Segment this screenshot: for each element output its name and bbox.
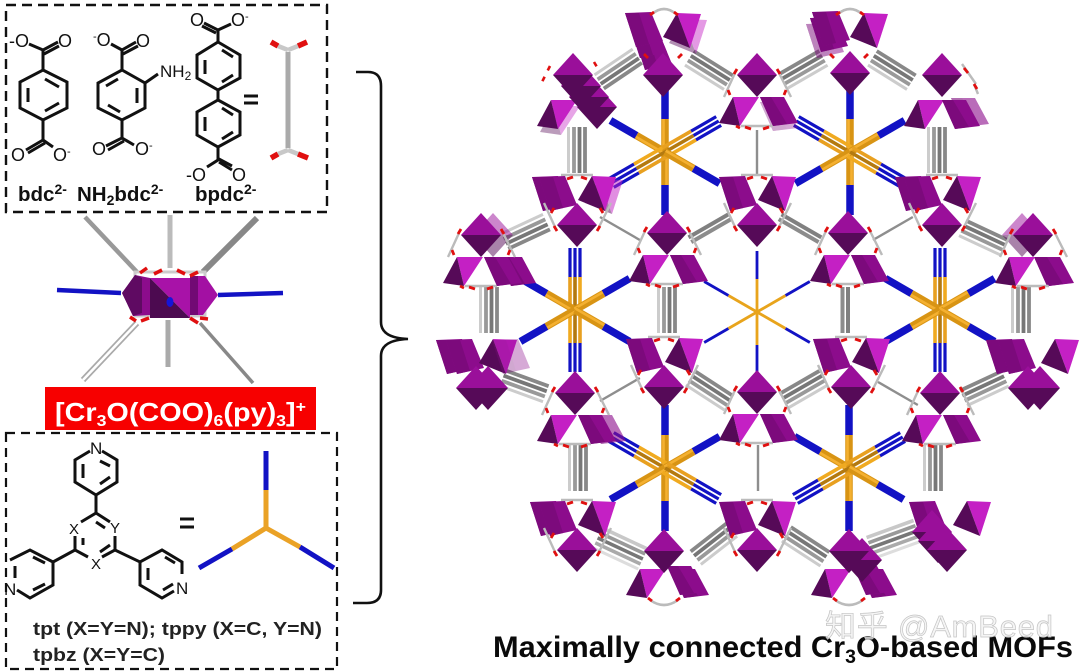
molecule: bpdc: O — [232, 165, 246, 185]
molecule: tripyridyl core: Y — [110, 520, 120, 537]
star: central node — [704, 251, 810, 373]
star: bottom right tritopic node — [793, 405, 905, 531]
chromium oxide clusters, upper half — [443, 9, 1074, 289]
title caption: 3 — [845, 647, 856, 668]
red label: cluster formula: 3 — [97, 413, 107, 430]
title caption: O-based MOFs — [856, 631, 1073, 664]
red label: cluster formula: 6 — [214, 413, 224, 430]
label: NH2bdc2-: 2- — [151, 181, 164, 197]
red label: cluster formula: (py) — [223, 397, 276, 427]
chromium oxide clusters, lower half — [436, 337, 1079, 605]
molecule: tripyridyl core: X — [69, 521, 79, 538]
molecule: bdc: O — [58, 31, 72, 51]
red label: cluster formula: 3 — [276, 413, 286, 430]
molecule: bdc: O — [53, 145, 67, 165]
label: bpdc2-: bpdc — [195, 183, 244, 206]
star: top left tritopic node — [609, 89, 721, 215]
molecule: bpdc: - — [245, 11, 249, 23]
molecule: tripyridyl core: N — [90, 439, 102, 458]
label: NH2bdc2-: 2 — [107, 192, 115, 208]
molecule: NH2bdc: O — [92, 139, 106, 159]
equals sign — [244, 96, 258, 103]
molecule: NH2bdc: O — [97, 30, 111, 50]
label: bpdc2-: 2- — [244, 181, 257, 197]
ligand names: tpt (X=Y=N); tppy (X=C, Y=N) — [33, 618, 322, 639]
molecule: bpdc: O — [231, 10, 245, 30]
bracket arrow — [353, 72, 408, 603]
molecule: NH2bdc: - — [149, 140, 153, 152]
molecule: bpdc — [186, 10, 249, 185]
equals sign — [180, 519, 194, 527]
red label: cluster formula: O(COO) — [106, 397, 214, 427]
molecule: NH2bdc: 2 — [185, 69, 192, 83]
label: bdc2-: 2- — [54, 181, 67, 197]
molecule: bdc: - — [67, 146, 71, 158]
label: bdc2-: bdc — [18, 183, 54, 206]
panel: tritopic pyridine ligands — [4, 433, 337, 669]
red label: cluster formula: [Cr — [55, 397, 93, 427]
molecule: bpdc: O — [190, 10, 204, 30]
red label: cluster formula — [45, 387, 316, 430]
MOF framework structure — [436, 9, 1079, 605]
star: right tritopic node — [885, 248, 995, 372]
star: bottom left tritopic node — [609, 405, 721, 531]
molecule: bpdc: -O — [186, 165, 206, 185]
star: top right tritopic node — [794, 89, 906, 215]
ligand name tpbz: tpbz (X=Y=C) — [33, 644, 165, 665]
molecule: tripyridyl core: X — [91, 556, 101, 573]
Cr3O cluster model — [57, 215, 283, 383]
molecule: tripyridyl core: N — [176, 579, 188, 598]
molecule: tripyridyl core: N — [4, 580, 16, 599]
panel: dicarboxylate linkers — [6, 5, 327, 212]
molecule: NH2bdc: O — [135, 139, 149, 159]
watermark: 知乎 @AmBeed — [825, 609, 1053, 644]
molecule: NH2bdc: NH — [160, 62, 185, 81]
molecule: tripyridyl core — [4, 439, 188, 599]
red label: cluster formula: ] — [286, 397, 296, 427]
star: left tritopic node — [520, 248, 630, 372]
linker stick model — [271, 42, 308, 158]
label: NH2bdc2-: bdc — [114, 183, 151, 206]
molecule: bdc: O — [11, 145, 25, 165]
molecule: NH2bdc: - — [93, 31, 97, 43]
tritopic linker model — [199, 451, 334, 568]
molecule: NH2bdc — [92, 30, 192, 159]
red label: cluster formula: + — [296, 399, 306, 416]
gray dicarboxylate bundles — [480, 49, 1029, 569]
molecule: NH2bdc: O — [136, 31, 150, 51]
molecule: bdc — [9, 31, 72, 165]
title caption: Maximally connected Cr — [493, 631, 836, 664]
molecule: bdc: -O — [9, 31, 29, 51]
label: NH2bdc2-: NH — [77, 183, 107, 206]
